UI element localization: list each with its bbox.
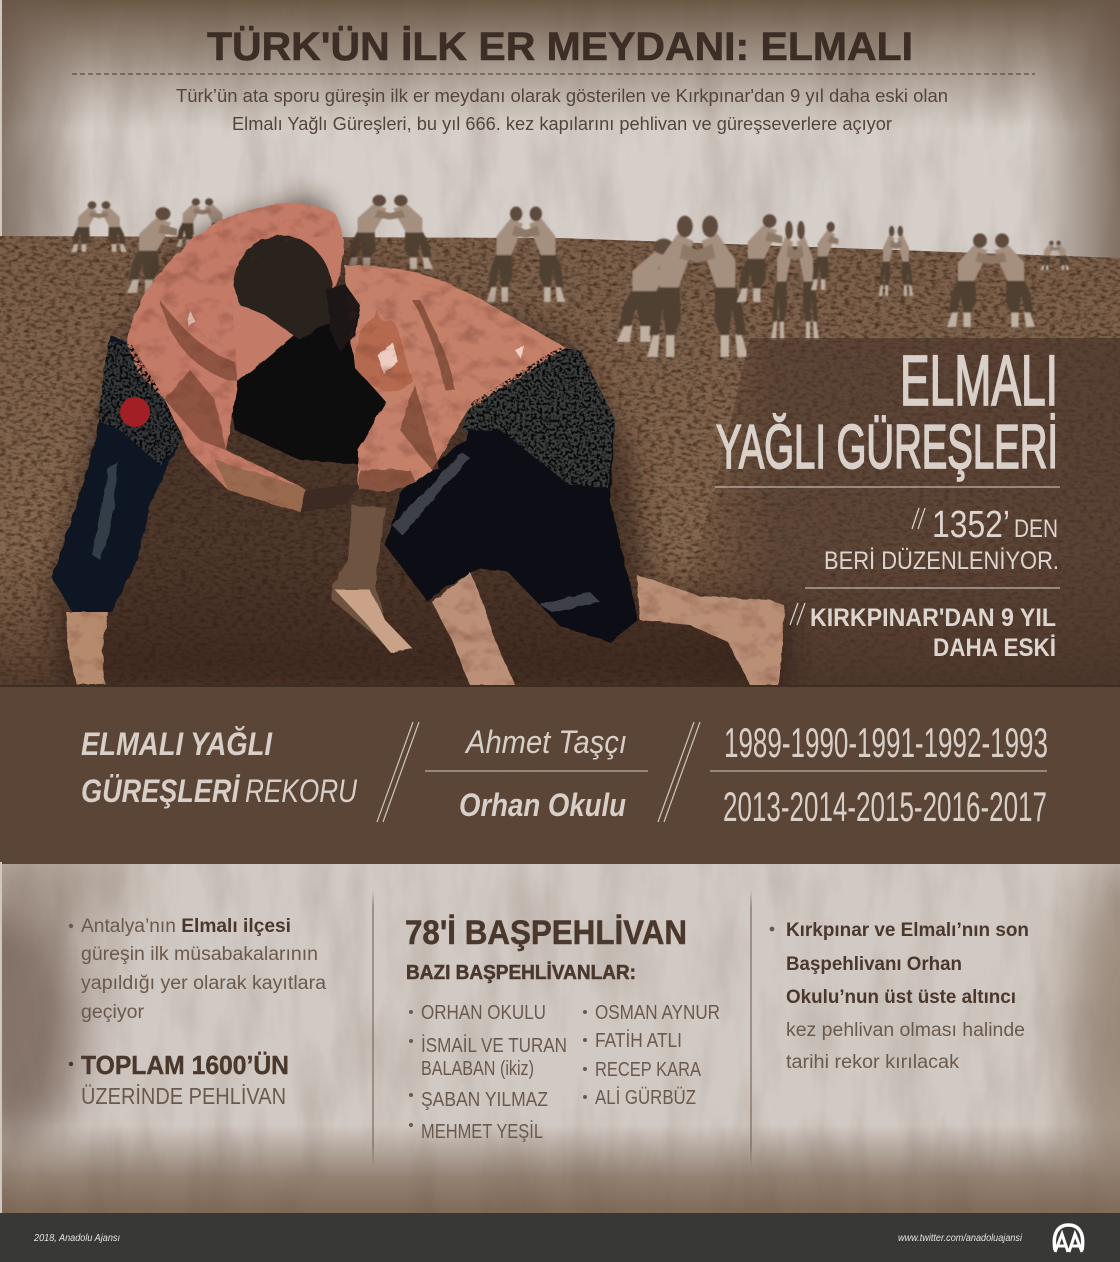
- front wrestler shoulder shade: [354, 310, 412, 391]
- text block: Elmalı history: [69, 916, 326, 1023]
- list: head wrestlers: [409, 1002, 720, 1143]
- fact: 9 years older than Kırkpınar: DAHA ESKİ: [933, 634, 1056, 662]
- list: head wrestlers: ALİ GÜRBÜZ: [595, 1086, 696, 1109]
- fact: since 1352: 1352’: [932, 504, 1010, 546]
- panel: dark overlay behind event title: [660, 338, 1120, 686]
- text block: Elmalı history: Antalya’nın Elmalı ilçesi: [81, 916, 291, 937]
- text block: Orhan Okulu record: tarihi rekor kırılacak: [786, 1052, 960, 1073]
- front wrestler hair: [326, 284, 360, 352]
- list: head wrestlers: BALABAN (ikiz): [421, 1058, 534, 1080]
- front wrestler stretched leg: [637, 575, 785, 685]
- list: head wrestlers: RECEP KARA: [595, 1059, 702, 1081]
- panel: lower parchment: [0, 840, 1120, 1213]
- list: head wrestlers: ORHAN OKULU: [421, 1002, 546, 1024]
- rear wrestler forearm mud: [215, 460, 328, 512]
- wrestlers shadow: [50, 195, 790, 686]
- heading: head wrestlers: BAZI BAŞPEHLİVANLAR:: [406, 961, 636, 984]
- intro text: Türk’ün ata sporu güreşin ilk er meydanı olarak gösterilen ve Kırkpınar'dan 9 yıl daha eski olan: [176, 86, 948, 106]
- text block: Elmalı history: yapıldığı yer olarak kayıtlara: [81, 973, 326, 994]
- title: TÜRK'ÜN İLK ER MEYDANI: ELMALI: [207, 24, 913, 69]
- footer link: www.twitter.com/anadoluajansi: [898, 1233, 1023, 1244]
- fact: since 1352: DEN: [1014, 515, 1058, 543]
- list: head wrestlers: FATİH ATLI: [595, 1029, 682, 1052]
- mesh waist of front wrestler: [462, 348, 615, 488]
- front wrestler tights: [385, 348, 638, 642]
- mesh waist of rear wrestler: [98, 342, 182, 465]
- slash divider: [377, 722, 419, 822]
- text block: wrestler total: TOPLAM 1600’ÜN: [81, 1050, 289, 1080]
- footer: [0, 1213, 1120, 1262]
- slash divider: [658, 722, 700, 822]
- mesh texture: [98, 342, 615, 488]
- left leg of rear wrestler: [52, 335, 182, 618]
- fact: 9 years older than Kırkpınar: KIRKPINAR'DAN 9 YIL: [810, 604, 1056, 632]
- intro text: [176, 86, 948, 134]
- skin blotch texture: [66, 204, 785, 685]
- panel: record band: [0, 685, 1120, 862]
- badge on tights: [120, 397, 150, 427]
- text block: Orhan Okulu record: Okulu’nun üst üste altıncı: [786, 987, 1016, 1008]
- record label: GÜREŞLERİ: [81, 773, 241, 809]
- heading: head wrestlers: 78'İ BAŞPEHLİVAN: [405, 914, 687, 952]
- rear wrestler hair: [233, 236, 332, 340]
- rear wrestler shadow areas: [160, 300, 238, 450]
- icon: Anadolu Agency logo: [1054, 1225, 1083, 1252]
- fact: since 1352: [824, 504, 1059, 575]
- main photo: two oil wrestlers: [50, 195, 790, 686]
- text block: Orhan Okulu record: [770, 920, 1029, 1073]
- fact: 9 years older than Kırkpınar: [790, 603, 1056, 662]
- record label: [81, 726, 358, 809]
- text block: wrestler total: [69, 1050, 289, 1109]
- record label: REKORU: [245, 773, 358, 809]
- front wrestler torso and arm: [345, 265, 566, 492]
- centre shin and foot: [332, 505, 412, 652]
- footer credit: 2018, Anadolu Ajansı: [33, 1233, 120, 1244]
- background: parchment header: [0, 0, 1120, 340]
- heading: Elmalı Yağlı Güreşleri: [716, 342, 1058, 482]
- list: head wrestlers: ŞABAN YILMAZ: [421, 1089, 548, 1111]
- text block: wrestler total: ÜZERİNDE PEHLİVAN: [81, 1083, 286, 1109]
- intro text: Elmalı Yağlı Güreşleri, bu yıl 666. kez kapılarını pehlivan ve güreşseverlere açıyor: [232, 114, 892, 134]
- text block: Orhan Okulu record: Başpehlivanı Orhan: [786, 954, 962, 975]
- text block: Orhan Okulu record: Kırkpınar ve Elmalı’nın son: [786, 920, 1029, 941]
- skin highlights: [188, 310, 524, 374]
- highlight on tights: [392, 452, 600, 612]
- list: head wrestlers: OSMAN AYNUR: [595, 1002, 720, 1024]
- hands: [300, 484, 360, 512]
- text block: Elmalı history: geçiyor: [81, 1002, 145, 1023]
- record holders: [459, 724, 627, 823]
- list: head wrestlers: MEHMET YEŞİL: [421, 1120, 543, 1143]
- background: wrestling field: [0, 236, 1120, 686]
- text block: Elmalı history: güreşin ilk müsabakalarının: [81, 944, 318, 965]
- front wrestler back leg: [432, 572, 515, 685]
- rear wrestler foot: [66, 612, 108, 684]
- record label: ELMALI YAĞLI: [81, 726, 273, 762]
- rear wrestler torso and arm: [127, 204, 344, 512]
- record years: [723, 719, 1048, 830]
- record holders: Ahmet Taşçı: [464, 724, 627, 760]
- background wrestlers in the distance: [71, 195, 1069, 357]
- dark centre of wrestlers: [215, 300, 385, 465]
- front wrestler muscle lines: [358, 300, 455, 492]
- text block: Orhan Okulu record: kez pehlivan olması halinde: [786, 1020, 1025, 1041]
- highlight on left tights: [92, 462, 118, 560]
- list: head wrestlers: İSMAİL VE TURAN: [421, 1034, 567, 1057]
- fact: since 1352: BERİ DÜZENLENİYOR.: [824, 546, 1059, 575]
- record holders: Orhan Okulu: [459, 787, 626, 823]
- heading: head wrestlers: [405, 914, 687, 984]
